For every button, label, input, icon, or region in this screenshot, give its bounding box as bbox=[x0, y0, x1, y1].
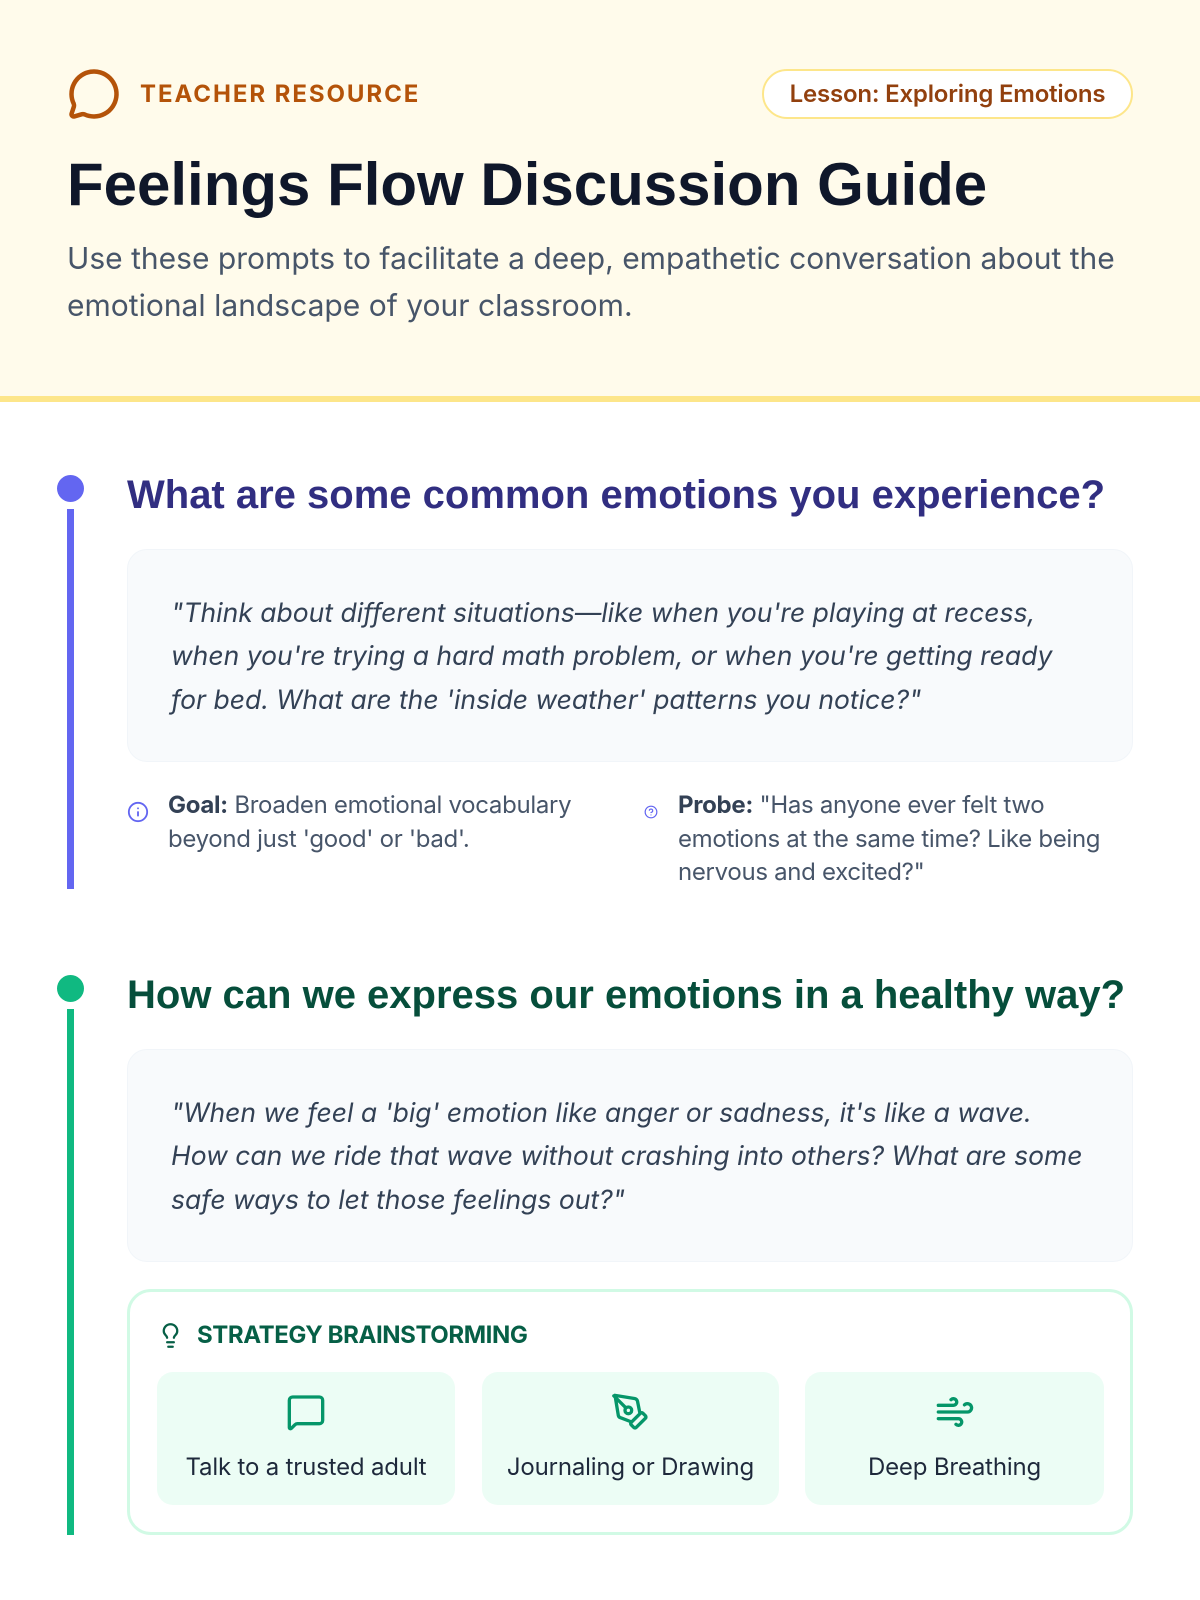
subtitle: Use these prompts to facilitate a deep, empathetic conversation about the bbox=[67, 241, 1115, 277]
icon: info bbox=[128, 802, 148, 822]
quote card bbox=[127, 1049, 1133, 1262]
goal note: Goal: Broaden emotional vocabulary bbox=[168, 790, 571, 819]
quote text: "Think about different situations—like when you're playing at recess, bbox=[171, 597, 1035, 629]
strategy panel bbox=[127, 1289, 1133, 1535]
timeline rail bbox=[67, 1009, 74, 1535]
title: Feelings Flow Discussion Guide bbox=[67, 151, 987, 218]
tile: talk: Talk to a trusted adult bbox=[186, 1452, 426, 1481]
lesson pill: Lesson: Exploring Emotions bbox=[790, 79, 1105, 108]
eyebrow label: TEACHER RESOURCE bbox=[140, 79, 420, 108]
goal note bbox=[168, 790, 571, 853]
timeline dot bbox=[57, 475, 84, 502]
quote text bbox=[168, 597, 1053, 716]
tile: breathing: Deep Breathing bbox=[868, 1452, 1041, 1481]
section 1 bbox=[57, 473, 1133, 889]
tile: talk bbox=[157, 1372, 455, 1505]
probe note: emotions at the same time? Like being bbox=[678, 824, 1100, 853]
lesson pill bbox=[762, 69, 1133, 119]
probe note bbox=[678, 790, 1100, 886]
strategy heading: STRATEGY BRAINSTORMING bbox=[197, 1320, 527, 1349]
tile: journaling: Journaling or Drawing bbox=[507, 1452, 754, 1481]
subtitle bbox=[67, 241, 1115, 324]
timeline rail bbox=[67, 509, 74, 889]
quote text: "When we feel a 'big' emotion like anger or sadness, it's like a wave. bbox=[171, 1097, 1032, 1129]
quote card bbox=[127, 549, 1133, 762]
tile: breathing bbox=[805, 1372, 1104, 1505]
question heading: How can we express our emotions in a healthy way? bbox=[127, 973, 1125, 1017]
goal note: beyond just 'good' or 'bad'. bbox=[168, 824, 469, 853]
tile: journaling bbox=[482, 1372, 779, 1505]
quote text: when you're trying a hard math problem, or when you're getting ready bbox=[171, 640, 1052, 672]
icon: question bbox=[644, 806, 658, 818]
question heading: What are some common emotions you experience? bbox=[127, 473, 1105, 517]
icon: lightbulb bbox=[162, 1323, 178, 1348]
icon: speech bubble bbox=[69, 69, 119, 119]
subtitle: emotional landscape of your classroom. bbox=[67, 288, 633, 324]
section 2 bbox=[57, 973, 1133, 1535]
probe note: nervous and excited?" bbox=[678, 857, 924, 886]
quote text bbox=[171, 1097, 1083, 1216]
quote text: safe ways to let those feelings out?" bbox=[171, 1184, 625, 1216]
timeline dot bbox=[57, 975, 84, 1002]
probe note: Probe: "Has anyone ever felt two bbox=[678, 790, 1044, 819]
header panel bbox=[0, 0, 1200, 402]
quote text: for bed. What are the 'inside weather' patterns you notice?" bbox=[171, 684, 921, 716]
quote text: How can we ride that wave without crashing into others? What are some bbox=[171, 1140, 1083, 1172]
